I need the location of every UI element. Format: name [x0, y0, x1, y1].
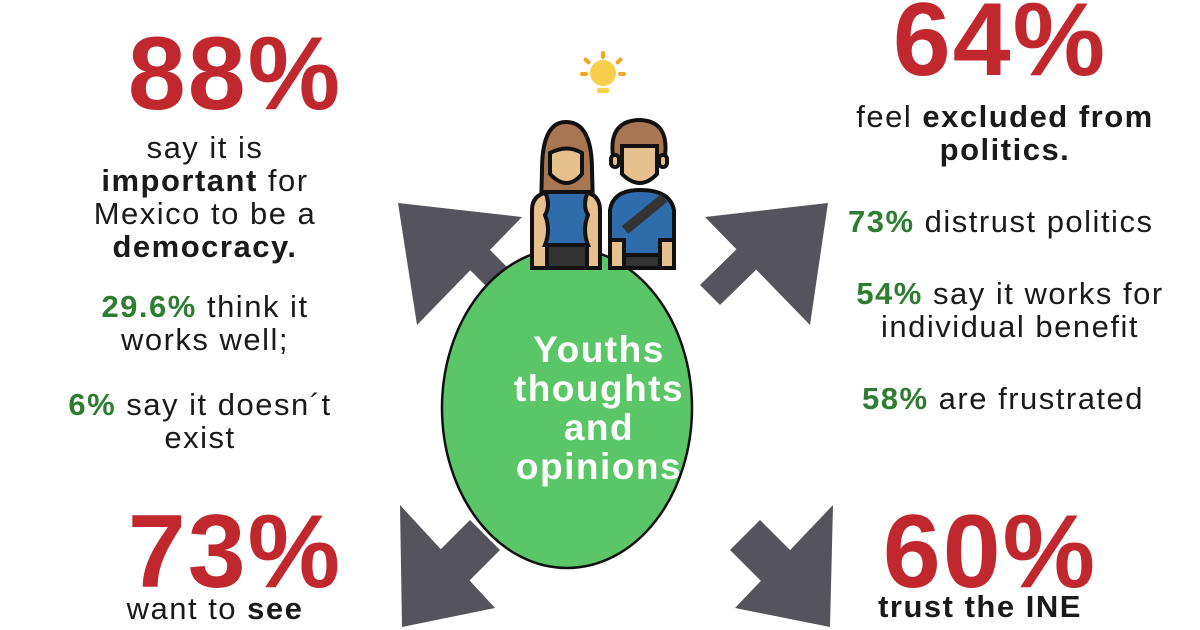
text: doesn't exist: exist — [164, 420, 236, 455]
text: distrust: 73% distrust politics — [848, 204, 1153, 239]
globe — [442, 248, 692, 568]
globe label: and — [564, 407, 634, 448]
text: doesn't exist: 6% say it doesn´t — [68, 387, 332, 422]
icon: girl — [532, 122, 600, 268]
text: excluded: feel excluded from — [856, 99, 1154, 134]
arrow: bottom-left — [400, 505, 500, 627]
text: democracy: democracy. — [112, 229, 298, 264]
arrow: bottom-right — [730, 505, 833, 627]
arrow: top-right — [700, 203, 828, 325]
text: frustrated: 58% are frustrated — [862, 381, 1144, 416]
icon: boy — [610, 120, 674, 268]
text: democracy: say it is — [147, 130, 263, 165]
text: individual benefit — [856, 276, 1164, 344]
text: works well — [101, 289, 309, 357]
text: democracy: Mexico to be a — [94, 196, 316, 231]
text: trust INE: trust the INE — [878, 589, 1082, 624]
text: works well: works well; — [121, 322, 289, 357]
text: individual benefit: individual benefit — [881, 309, 1139, 344]
text: excluded — [856, 99, 1154, 167]
text: democracy — [94, 130, 316, 264]
stat: 88%: 88% — [128, 16, 342, 132]
text: individual benefit: 54% say it works for — [856, 276, 1164, 311]
text: want to see: want to see — [127, 591, 303, 626]
icon: light bulb — [580, 51, 626, 93]
text: democracy: important for — [101, 163, 309, 198]
stat: 60%: 60% — [883, 494, 1097, 610]
stat: 73%: 73% — [128, 494, 342, 610]
globe label: Youths — [533, 329, 665, 370]
arrow: top-left — [398, 203, 525, 325]
text: doesn't exist — [68, 387, 332, 455]
text: excluded: politics. — [940, 132, 1070, 167]
text: works well: 29.6% think it — [101, 289, 309, 324]
globe label: thoughts — [514, 368, 684, 409]
globe label: opinions — [516, 446, 682, 487]
